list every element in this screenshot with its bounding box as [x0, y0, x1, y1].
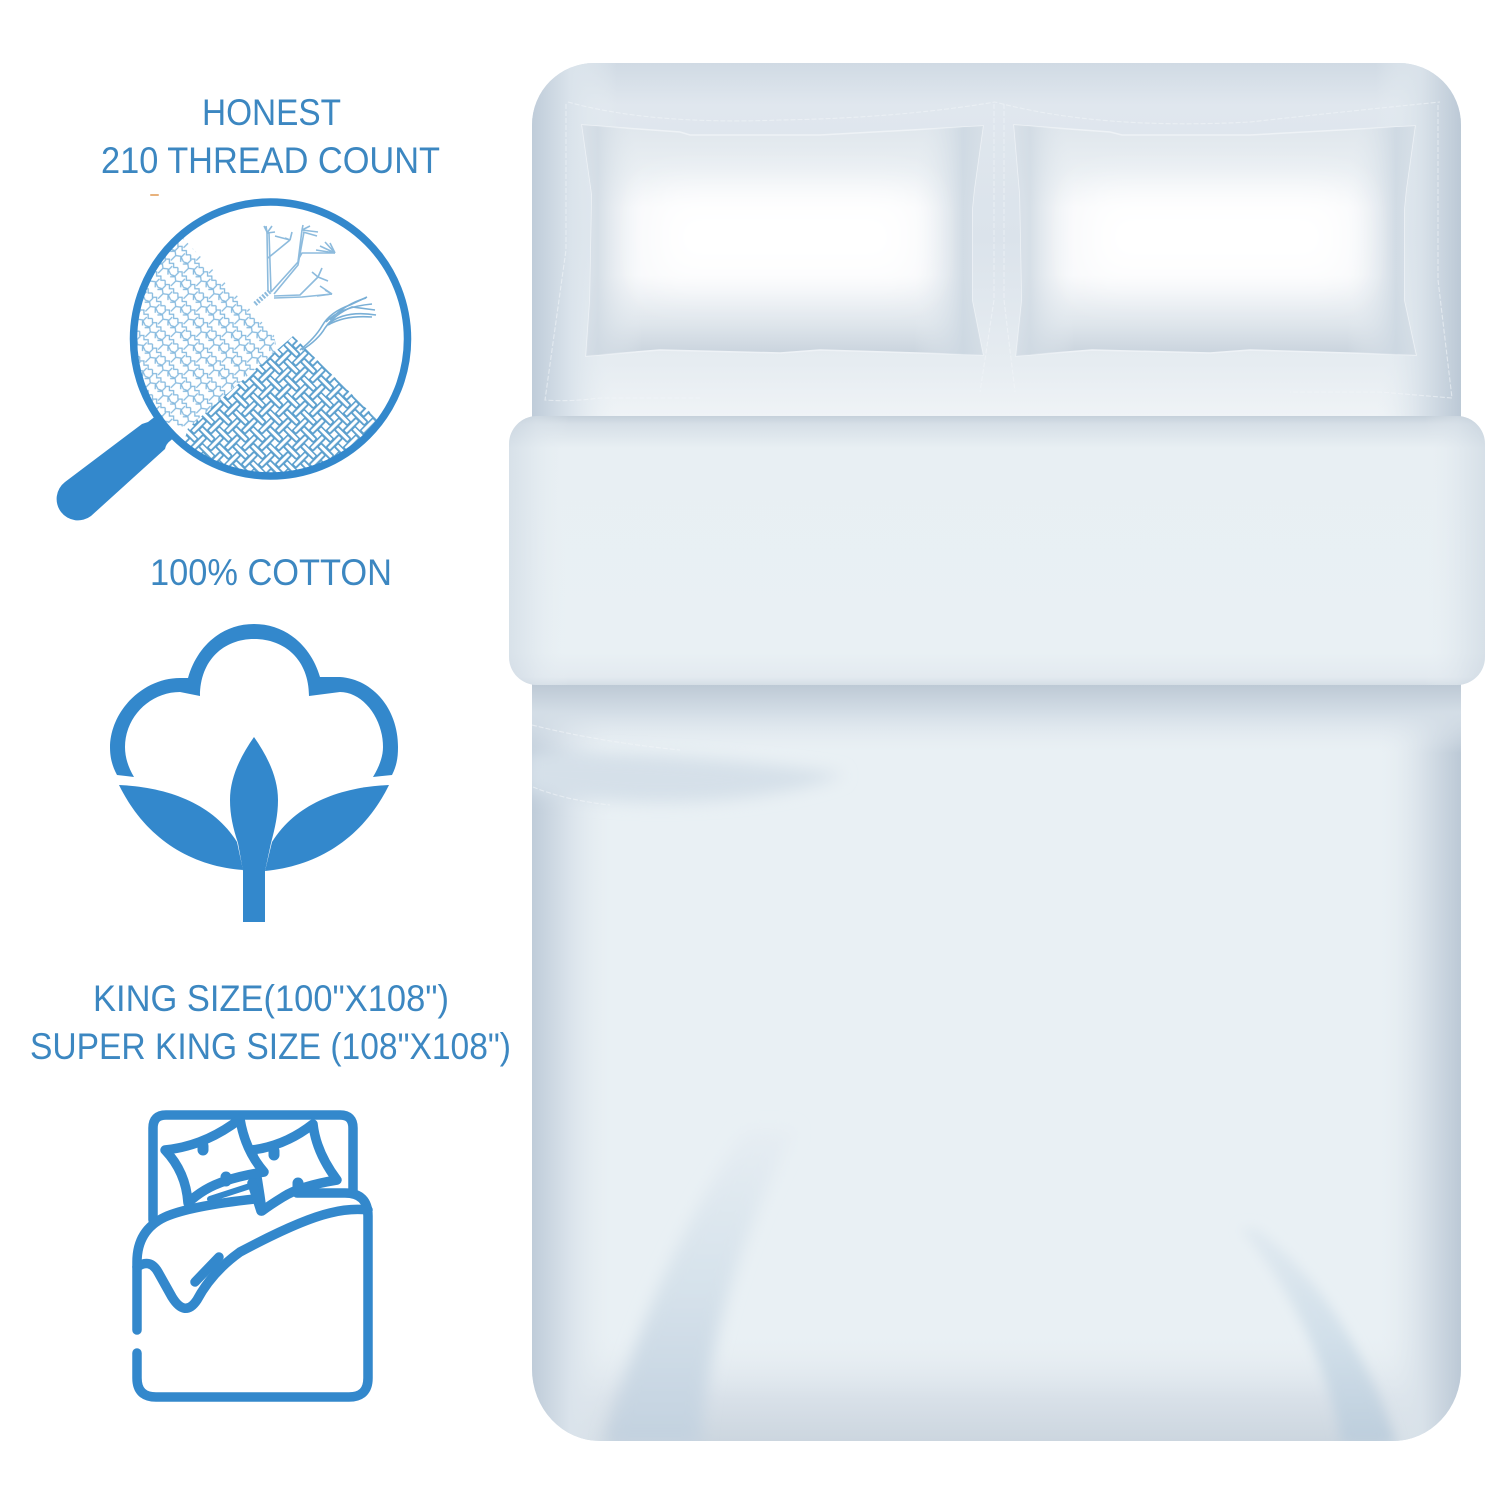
front pillow dimples: [274, 1151, 298, 1187]
duvet band: [509, 416, 1485, 685]
right foot fold: [1258, 1238, 1395, 1441]
heading: honest 210 thread count: HONEST: [202, 92, 341, 133]
left pillow: [582, 125, 983, 356]
bed illustration: [509, 63, 1485, 1445]
fitted sheet base: [525, 63, 1461, 1445]
pillow highlight: [655, 192, 915, 282]
back pillow: [165, 1119, 264, 1203]
back pillow dimples: [203, 1146, 226, 1181]
icon: magnifier showing woven threads: [57, 202, 408, 520]
headboard: [153, 1115, 353, 1220]
center leaf: [230, 737, 278, 871]
pillow side shading: [582, 125, 983, 356]
dense basket weave: [185, 336, 377, 472]
band right shading: [1461, 426, 1485, 680]
heading: sizes: SUPER KING SIZE (108"X108"): [30, 1026, 511, 1067]
left foot fold: [610, 1180, 756, 1438]
boll outline: [110, 624, 398, 777]
pillow tuck: [210, 1186, 250, 1199]
frayed thread tree: [255, 225, 335, 304]
front pillow: [252, 1124, 337, 1211]
right leaf: [265, 785, 389, 871]
heading: sizes: KING SIZE(100"X108"): [93, 978, 449, 1019]
loose thread texture: [125, 238, 277, 428]
right pillow: [1014, 125, 1416, 356]
pillow side shading: [1014, 125, 1416, 356]
headboard area: [572, 63, 1422, 306]
lens ring: [134, 202, 408, 476]
duvet fold: [137, 1209, 368, 1308]
band left shading: [509, 427, 530, 680]
heading: sizes: [30, 978, 511, 1067]
fold crease: [195, 1257, 219, 1282]
heading: honest 210 thread count: [101, 92, 440, 181]
stem: [243, 862, 265, 922]
icon: bed outline: [137, 1115, 368, 1397]
pillow highlight: [1087, 192, 1347, 282]
foot shading: [546, 1378, 1444, 1441]
left leaf: [119, 785, 243, 870]
heading: honest 210 thread count: 210 THREAD COUNT: [101, 140, 440, 181]
shade below duvet band: [532, 685, 1461, 744]
duvet outline: [137, 1193, 368, 1397]
sheet wrinkle: [525, 752, 845, 802]
front pillow lower edge: [252, 1183, 261, 1211]
left edge shading: [532, 63, 598, 1440]
heading: 100% cotton: 100% COTTON: [150, 552, 392, 593]
second frayed thread: [300, 297, 376, 350]
icon: cotton boll: [110, 624, 398, 922]
stitching: [532, 102, 1452, 805]
small orange mark: [150, 194, 159, 196]
right edge shading: [1398, 64, 1461, 1440]
handle: [57, 415, 176, 520]
